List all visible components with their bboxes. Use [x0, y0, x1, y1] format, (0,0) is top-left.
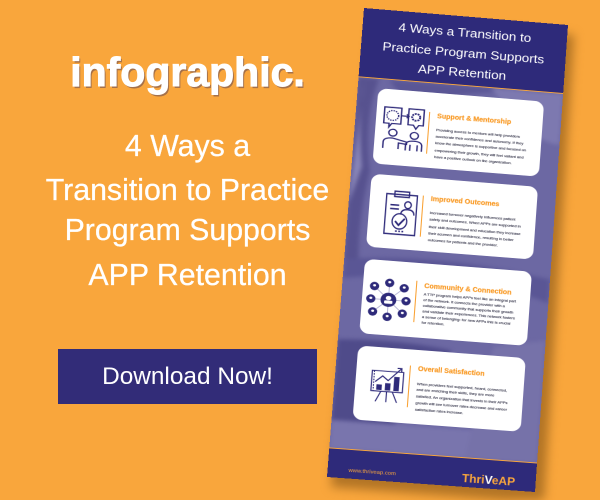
card text: a sense of belonging: for new APPs this is crucial — [422, 314, 511, 325]
card text: satisfaction rates increase. — [415, 407, 464, 415]
poster: infographic preview — [327, 8, 568, 492]
text block: title: Transition to Practice — [46, 174, 329, 207]
card heading: Improved Outcomes — [431, 196, 500, 208]
panel: improved outcomes — [366, 174, 538, 260]
poster title — [382, 20, 545, 83]
button: download now — [58, 349, 317, 404]
card text: have a positive outlook on the organization. — [434, 154, 512, 165]
card text — [434, 127, 526, 165]
background swirl — [330, 78, 563, 462]
card text: their skill development and education they increase — [429, 224, 521, 236]
text block: title: Program Supports — [65, 214, 310, 247]
website: www.thriveap.com — [348, 468, 396, 477]
footer band — [327, 447, 537, 492]
card text: When providers feel supported, heard, connected, — [417, 381, 507, 392]
divider — [426, 112, 430, 154]
card text: satisfied. An organization that invests in their APPs — [416, 394, 508, 405]
divider — [413, 281, 418, 322]
card heading: Overall Satisfaction — [418, 366, 485, 378]
card text: Increased turnover negatively influences patient — [430, 210, 516, 222]
card text — [428, 210, 521, 248]
card text: of the network. It connects the provider with a — [423, 297, 505, 308]
text block: title — [46, 130, 329, 292]
card text: empowering their growth, they will feel valiant and — [434, 147, 524, 159]
card text: collaborative community that supports their growth — [423, 302, 514, 314]
card heading: Community & Connection — [424, 283, 512, 296]
card text: growth will see turnover rates decrease and career — [415, 400, 507, 412]
icon: clipboard — [383, 190, 418, 237]
icon: mentor — [382, 106, 426, 152]
card text: and are enriching their skills, they are more — [416, 387, 495, 398]
card text: safety and outcomes. When APPs are supported in — [429, 217, 521, 229]
text block: title: APP Retention — [88, 259, 287, 292]
poster title: Practice Program Supports — [382, 39, 545, 66]
card text: outcomes for patients and the provider. — [428, 237, 498, 248]
button: download now: Download Now! — [102, 363, 273, 390]
card text: their acumen and confidence, resulting in better — [428, 231, 514, 242]
card text: accelerate their confidence and autonomy. If they — [435, 134, 524, 146]
icon: network — [366, 278, 411, 322]
panel: community and connection — [359, 259, 532, 346]
card text: A TTP program helps APPs feel like an integral part — [424, 291, 516, 303]
divider — [407, 366, 411, 407]
poster title: APP Retention — [417, 62, 507, 83]
heading: infographic: infographic. — [70, 49, 305, 95]
card text: and validate their experiences. This network fosters — [422, 308, 515, 320]
panel: overall satisfaction — [353, 345, 526, 432]
panel: support and mentorship — [372, 88, 544, 177]
card text — [414, 381, 508, 415]
text block: title: 4 Ways a — [125, 130, 250, 163]
header band — [359, 8, 568, 94]
card heading: Support & Mentorship — [437, 113, 511, 126]
card text: Providing access to mentors will help providers — [436, 127, 520, 139]
divider — [420, 196, 424, 237]
card text: know the atmosphere is supportive and focused on — [435, 141, 526, 153]
card text — [421, 291, 516, 326]
logo: ThriVeAP — [462, 473, 515, 489]
card text: for retention. — [421, 319, 445, 326]
poster title: 4 Ways a Transition to — [398, 20, 532, 45]
icon: chart board — [370, 368, 405, 404]
